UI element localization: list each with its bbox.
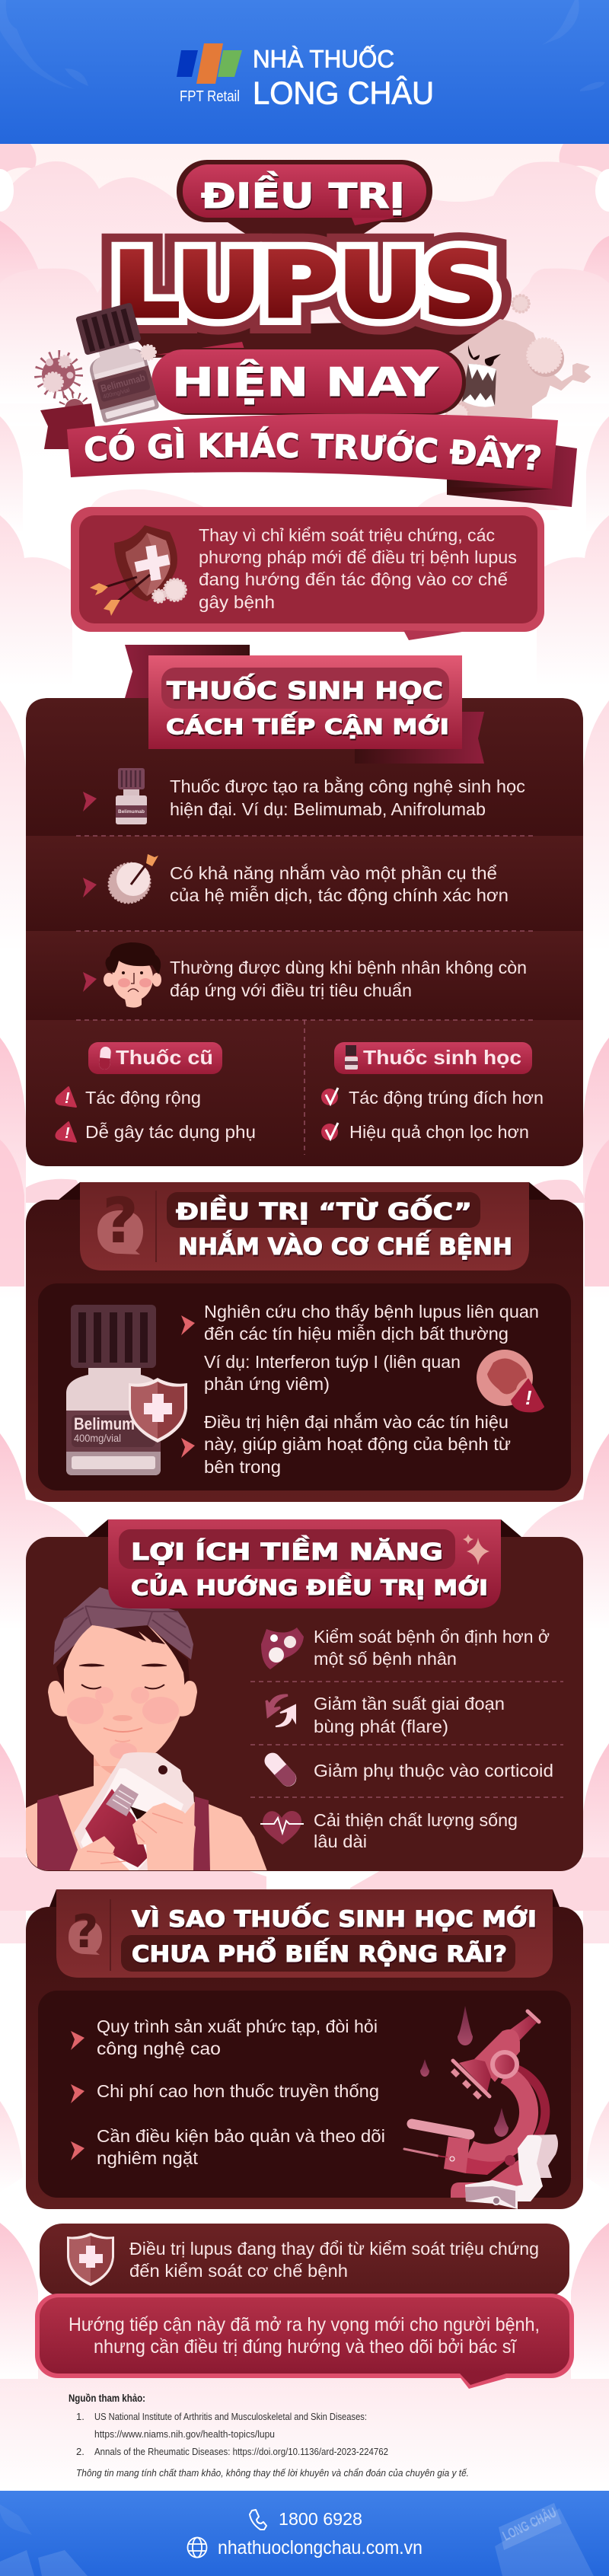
icon: capsule: [99, 1046, 111, 1070]
callout text: [199, 525, 517, 612]
benefit list: bùng phát (flare): [314, 1717, 448, 1736]
references: US National Institute of Arthritis and Musculoskeletal and Skin Diseases:: [94, 2411, 367, 2422]
closing callout: nhưng cần điều trị đúng hướng và theo dõi bởi bác sĩ: [94, 2336, 517, 2358]
icon: heart pulse: [260, 1811, 304, 1844]
comparison column: thuốc cũ: !: [65, 1125, 70, 1142]
comparison column: thuốc cũ: Tác động rộng: [85, 1088, 201, 1108]
pill: HIỆN NAY: [151, 342, 466, 415]
icon: targeted cell: [102, 854, 158, 910]
section heading: VÌ SAO THUỐC SINH HỌC MỚI: [132, 1903, 537, 1932]
bottle illustration: Belimumab: [100, 371, 146, 394]
section heading: LỢI ÍCH TIỀM NĂNG: [131, 1535, 443, 1566]
logo wordmark: NHÀ THUỐC: [253, 46, 394, 73]
icon: question bubble: ?: [102, 1185, 139, 1258]
summary box: Điều trị lupus đang thay đổi từ kiểm soát triệu chứng: [129, 2239, 539, 2259]
closing callout: Hướng tiếp cận này đã mở ra hy vọng mới cho người bệnh,: [69, 2314, 540, 2335]
callout text: phương pháp mới để điều trị bệnh lupus: [199, 547, 517, 567]
treatment text: này, giúp giảm hoạt động của bệnh từ: [204, 1434, 511, 1454]
reason 1: [71, 2016, 378, 2058]
references: 1.: [76, 2411, 84, 2422]
icon: sparkles: [463, 1534, 489, 1565]
header band: [0, 0, 609, 144]
panel: điều trị từ gốc: [26, 1182, 583, 1502]
monster illustration: [446, 295, 590, 426]
benefit list: một số bệnh nhân: [314, 1649, 457, 1669]
interferon example: [204, 1350, 544, 1411]
icon: question bubble: ?: [72, 1905, 98, 1959]
panel: lợi ích tiềm năng: [26, 1519, 583, 1871]
website: nhathuoclongchau.com.vn: [218, 2537, 422, 2558]
row 2: targeting: Có khả năng nhắm vào một phần cụ thể: [170, 863, 497, 883]
research text: đến các tín hiệu miễn dịch bất thường: [204, 1324, 509, 1344]
panel: thuốc sinh học: [26, 645, 583, 1166]
section heading ribbon: [148, 655, 484, 764]
treatment text: [181, 1412, 511, 1477]
reason 3: [71, 2126, 385, 2168]
references: https://www.niams.nih.gov/health-topics/lupu: [94, 2428, 275, 2440]
comparison column: thuốc cũ: !: [65, 1090, 70, 1107]
ribbon: có gì khác trước đây: CÓ GÌ KHÁC TRƯỚC ĐÂY?: [85, 426, 542, 472]
treatment text: bên trong: [204, 1457, 281, 1477]
logo: FPT Retail: [177, 43, 242, 105]
icon: shield with arrows: [90, 525, 186, 616]
comparison column: thuốc sinh học: Thuốc sinh học: [363, 1046, 521, 1069]
section heading: CHƯA PHỔ BIẾN RỘNG RÃI?: [132, 1937, 507, 1967]
icon: small bottle: [116, 768, 147, 824]
icon: inflamed cell with warning: [477, 1350, 544, 1411]
store sign: LONG CHÂU: [500, 2504, 559, 2544]
inner panel: [38, 1283, 571, 1490]
icon: cycle arrows: [266, 1695, 295, 1726]
logo: FPT Retail: FPT Retail: [180, 88, 240, 105]
section heading: [108, 1519, 501, 1608]
icon: sad patient face: [104, 942, 161, 1008]
icon: cell cluster: [261, 1628, 304, 1669]
icon: Belimumab bottle with shield: 400mg/vial: [74, 1432, 121, 1444]
icon: globe: [187, 2538, 207, 2558]
title shadow backing: [126, 320, 500, 358]
callout: new approach: [71, 507, 544, 640]
benefit list: Cải thiện chất lượng sống: [314, 1810, 518, 1830]
comparison column: thuốc sinh học: Tác động trúng đích hơn: [349, 1088, 544, 1108]
callout text: Thay vì chỉ kiểm soát triệu chứng, các: [199, 525, 495, 545]
interferon example: phản ứng viêm): [204, 1374, 330, 1394]
benefit list: [250, 1627, 563, 1851]
callout text: đang hướng đến tác động vào cơ chế: [199, 569, 508, 589]
references: Annals of the Rheumatic Diseases: https://doi.org/10.1136/ard-2023-224762: [94, 2446, 388, 2457]
references: Thông tin mang tính chất tham khảo, không thay thế lời khuyên và chẩn đoán của chuyên gia y tế.: [76, 2467, 469, 2479]
word: LUPUS: LUPUS: [113, 233, 499, 337]
illustration: woman applying cream: [26, 1587, 267, 1871]
row 1: biologic drug: [83, 768, 525, 824]
icon: phone: [250, 2510, 266, 2530]
benefit list: Giảm tần suất giai đoạn: [314, 1694, 505, 1714]
bottle illustration: 400mg/vial: [102, 387, 130, 400]
row 2: targeting: [83, 854, 509, 910]
treatment text: Điều trị hiện đại nhắm vào các tín hiệu: [204, 1412, 509, 1432]
logo wordmark: LONG CHÂU: [253, 75, 434, 111]
ribbon: có gì khác trước đây: [40, 403, 577, 507]
section heading: ĐIỀU TRỊ “TỪ GỐC”: [176, 1194, 472, 1226]
row 3: patient: đáp ứng với điều trị tiêu chuẩn: [170, 980, 412, 1000]
bottle illustration: [75, 302, 160, 423]
decorative storefront: [0, 2504, 594, 2576]
research text: Nghiên cứu cho thấy bệnh lupus liên quan: [204, 1302, 539, 1321]
section heading: CỦA HƯỚNG ĐIỀU TRỊ MỚI: [131, 1571, 488, 1600]
references: Nguồn tham khảo:: [69, 2392, 145, 2404]
store sign: [499, 2503, 562, 2550]
section heading ribbon: CÁCH TIẾP CẬN MỚI: [166, 711, 449, 739]
reason 1: công nghệ cao: [97, 2039, 221, 2058]
benefit list: Giảm phụ thuộc vào corticoid: [314, 1761, 553, 1781]
summary box: [40, 2224, 569, 2297]
benefit list: Kiểm soát bệnh ổn định hơn ở: [314, 1627, 550, 1647]
illustration: microscope: [404, 2006, 558, 2209]
row 3: patient: [83, 942, 527, 1008]
icon: capsule: [261, 1749, 300, 1790]
section heading ribbon: THUỐC SINH HỌC: [167, 674, 443, 705]
reason 2: Chi phí cao hơn thuốc truyền thống: [97, 2081, 379, 2101]
comparison column: thuốc sinh học: Hiệu quả chọn lọc hơn: [349, 1122, 529, 1142]
row 3: patient: Thường được dùng khi bệnh nhân không còn: [170, 958, 527, 977]
word: LUPUS: LUPUS: [113, 233, 499, 337]
summary box: đến kiểm soát cơ chế bệnh: [129, 2261, 348, 2281]
comparison column: thuốc cũ: [56, 1042, 256, 1142]
comparison column: thuốc cũ: Dễ gây tác dụng phụ: [85, 1122, 256, 1142]
section heading: [80, 1182, 529, 1270]
icon: medical shield: [67, 2233, 114, 2286]
pill: ĐIỀU TRỊ: [177, 160, 432, 238]
pill: ĐIỀU TRỊ: ĐIỀU TRỊ: [201, 172, 405, 216]
row 1: biologic drug: Thuốc được tạo ra bằng công nghệ sinh học: [170, 776, 525, 796]
references: [69, 2392, 469, 2479]
benefit list: lâu dài: [314, 1832, 367, 1851]
panel: vì sao chưa phổ biến: [26, 1889, 583, 2209]
section heading: [56, 1889, 553, 1978]
icon: Belimumab bottle with shield: Belimum: [74, 1414, 135, 1433]
icon: Belimumab bottle with shield: [66, 1305, 187, 1475]
section heading: NHẮM VÀO CƠ CHẾ BỆNH: [178, 1230, 512, 1261]
comparison column: thuốc cũ: Thuốc cũ: [116, 1046, 213, 1069]
callout text: gây bệnh: [199, 592, 275, 612]
research text: [181, 1302, 539, 1344]
footer band: [0, 2491, 609, 2576]
title block: [34, 160, 591, 507]
phone number: 1800 6928: [279, 2509, 362, 2529]
cell on bottle: [142, 346, 155, 359]
references: 2.: [76, 2446, 84, 2457]
closing callout: [35, 2294, 574, 2389]
word: LUPUS: LUPUS: [113, 233, 499, 337]
comparison column: thuốc sinh học: [321, 1042, 544, 1142]
icon: inflamed cell with warning: !: [525, 1386, 532, 1409]
icon: mini bottle: [345, 1045, 358, 1070]
pill: HIỆN NAY: HIỆN NAY: [172, 359, 439, 406]
reason 3: nghiêm ngặt: [97, 2148, 199, 2168]
row 1: biologic drug: hiện đại. Ví dụ: Belimumab, Anifrolumab: [170, 799, 486, 819]
inner panel: [38, 1991, 571, 2209]
logo wordmark: [253, 46, 434, 111]
virus illustration: [38, 354, 88, 422]
interferon example: Ví dụ: Interferon tuýp I (liên quan: [204, 1352, 461, 1372]
icon: small bottle: Belimumab: [118, 809, 145, 815]
reason 1: Quy trình sản xuất phức tạp, đòi hỏi: [97, 2016, 378, 2036]
row 2: targeting: của hệ miễn dịch, tác động chính xác hơn: [170, 885, 509, 905]
reason 3: Cần điều kiện bảo quản và theo dõi: [97, 2126, 385, 2146]
